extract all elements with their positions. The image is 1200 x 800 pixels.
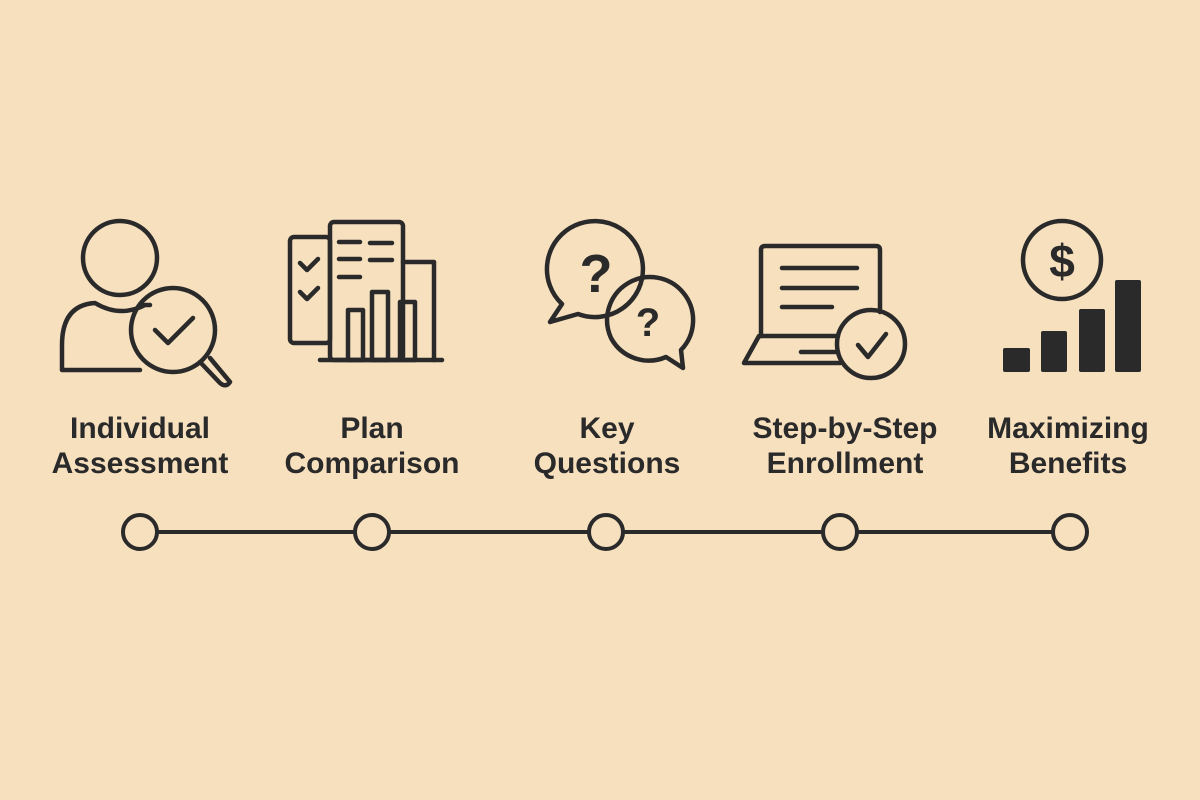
icon: laptop with check	[744, 246, 905, 378]
text: ?	[580, 244, 612, 304]
labels: Enrollment	[767, 447, 923, 480]
icon: plan comparison documents	[290, 222, 442, 360]
icon: question speech bubbles	[547, 221, 693, 368]
labels: Step-by-Step	[752, 412, 938, 445]
timeline	[123, 515, 1087, 549]
icon: person with magnifier	[62, 221, 230, 385]
labels: Key	[579, 412, 635, 445]
bar chart: rising bars	[1003, 280, 1141, 372]
labels: Questions	[534, 447, 680, 480]
labels: Plan	[340, 412, 404, 445]
labels: Individual	[70, 412, 210, 445]
text: ?	[636, 301, 660, 345]
labels: Assessment	[52, 447, 228, 480]
labels: Benefits	[1009, 447, 1127, 480]
labels: Maximizing	[987, 412, 1149, 445]
labels: Comparison	[284, 447, 460, 480]
labels	[52, 412, 1149, 480]
icon: dollar coin and bars	[1023, 221, 1101, 299]
text: $	[1049, 235, 1075, 287]
